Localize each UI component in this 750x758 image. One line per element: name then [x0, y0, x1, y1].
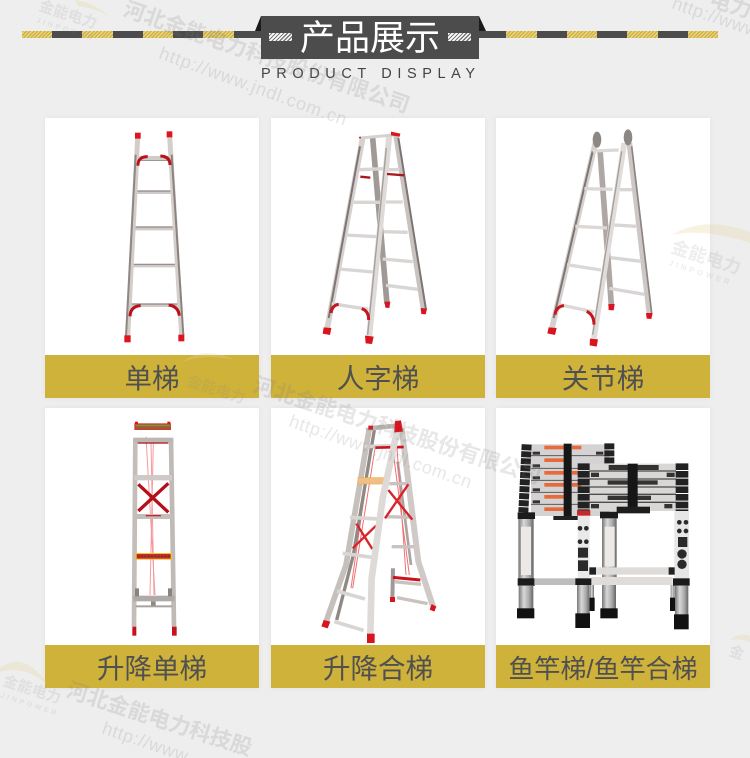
subtitle: PRODUCT DISPLAY	[261, 66, 481, 82]
panel: single ladder	[45, 118, 259, 398]
watermarks: JINPOWER	[35, 17, 96, 43]
label	[271, 355, 485, 398]
icon: single ladder	[124, 131, 184, 342]
front ladder	[575, 463, 690, 629]
panel: A-frame ladder	[271, 118, 485, 398]
label: 鱼竿梯/鱼竿合梯	[508, 654, 698, 684]
label: 单梯	[124, 363, 180, 394]
watermarks: http://www.jndl.com.cn	[157, 43, 350, 130]
watermarks: 金能电力	[1, 672, 63, 707]
label: 升降单梯	[97, 653, 207, 684]
icon: articulated ladder	[547, 129, 653, 347]
watermarks: 金	[727, 642, 747, 663]
label: 关节梯	[562, 363, 644, 394]
icon: telescoping fishing-rod ladders	[517, 443, 690, 630]
icon: telescoping A-frame ladder	[321, 420, 436, 643]
panel: telescoping A-frame ladder	[271, 408, 485, 688]
icon: telescoping single ladder	[132, 422, 177, 636]
label	[45, 645, 259, 688]
watermarks: 金能电力	[185, 372, 247, 407]
watermarks: JINPOWER	[667, 258, 734, 288]
label	[496, 645, 710, 688]
watermarks: 河北金能电力科技股份有限公司	[120, 0, 413, 118]
panel: fishing-rod ladders	[496, 408, 710, 688]
panel: telescoping single ladder	[45, 408, 259, 688]
title banner	[261, 16, 479, 59]
title: 产品展示	[300, 19, 440, 58]
header: striped rule	[22, 16, 718, 38]
watermarks: 河北金能电力科技股份有限公司	[250, 372, 544, 489]
back ladder	[517, 443, 675, 618]
watermarks: http://www.jndl.com.cn	[287, 411, 475, 492]
label: 人字梯	[337, 363, 419, 394]
label	[496, 355, 710, 398]
label	[271, 645, 485, 688]
label: 升降合梯	[323, 653, 433, 684]
watermarks: JINPOWER	[0, 692, 60, 718]
watermarks: 金能电力	[669, 236, 744, 278]
panel: articulated ladder	[496, 118, 710, 398]
icon: A-frame ladder	[322, 132, 427, 344]
label	[45, 355, 259, 398]
